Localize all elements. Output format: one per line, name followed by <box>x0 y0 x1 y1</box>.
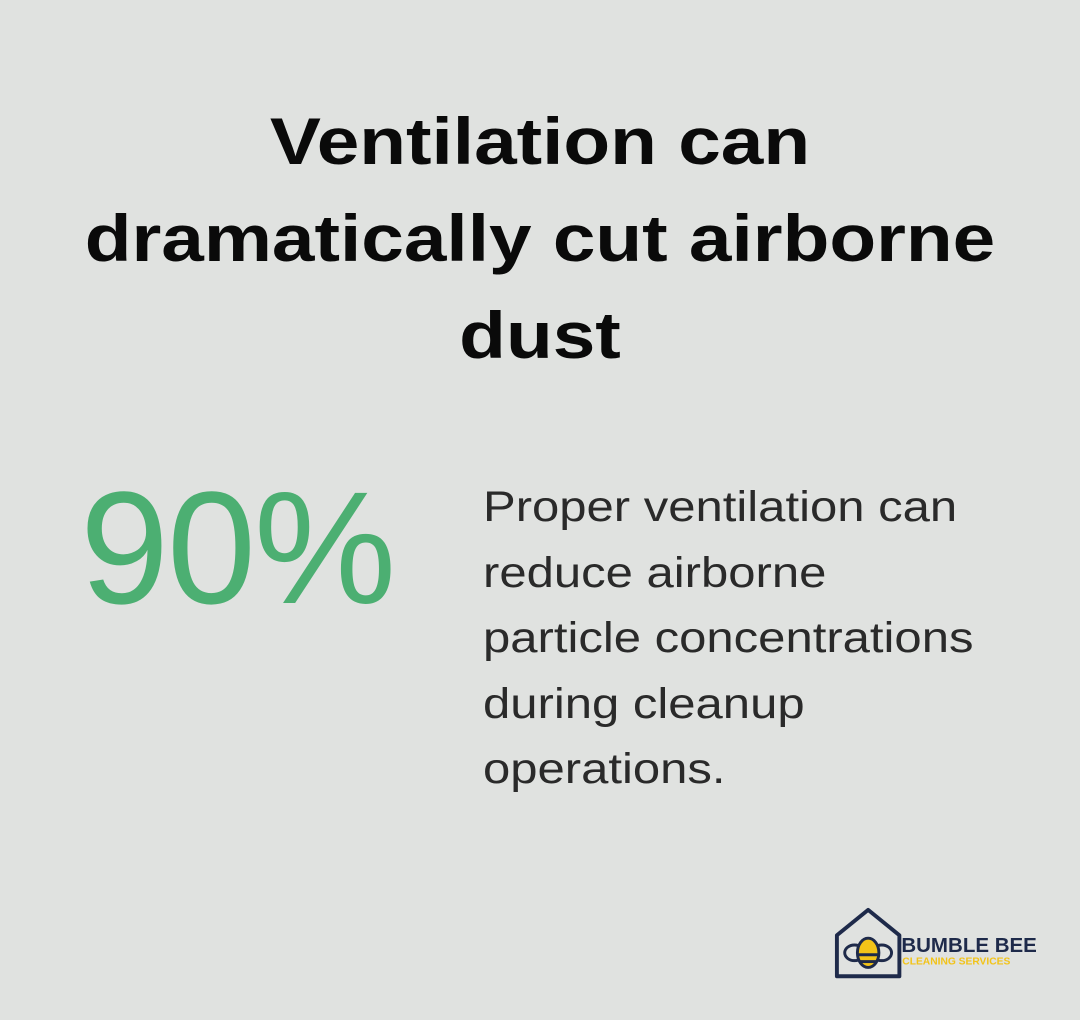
title: dust <box>459 298 621 372</box>
icon: house with bee <box>837 910 899 976</box>
description text: particle concentrations <box>483 614 973 662</box>
description text: during cleanup <box>483 680 805 728</box>
logo text: CLEANING SERVICES <box>902 957 1010 968</box>
title <box>85 104 995 372</box>
stat: 90%: 90% <box>80 458 394 637</box>
description text <box>483 483 973 793</box>
logo text: BUMBLE BEE <box>901 934 1037 957</box>
description text: reduce airborne <box>483 548 826 596</box>
logo <box>834 908 1037 978</box>
description text: operations. <box>483 745 726 793</box>
description text: Proper ventilation can <box>483 483 957 531</box>
title: dramatically cut airborne <box>85 201 995 275</box>
title: Ventilation can <box>270 104 810 178</box>
logo text <box>901 934 1037 968</box>
